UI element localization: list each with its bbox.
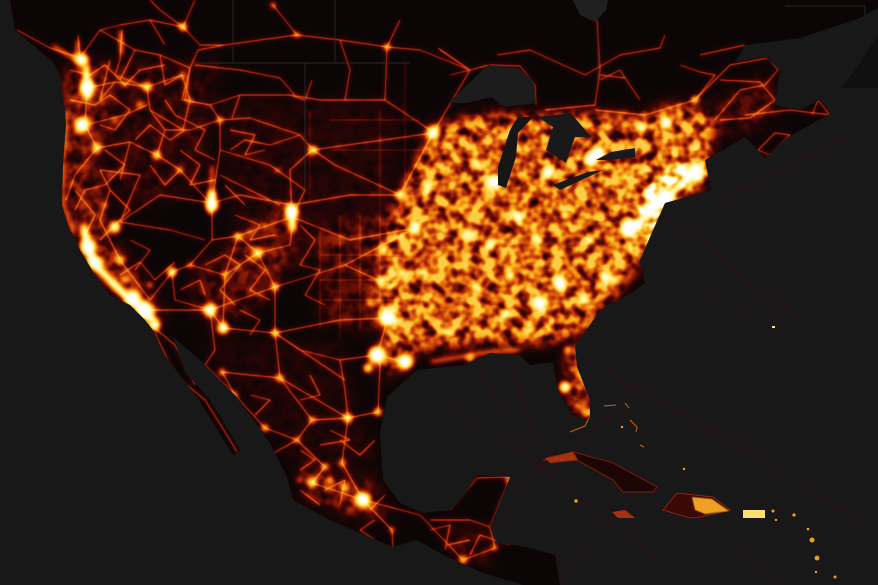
lake: Michigan <box>498 117 533 188</box>
islands: Caribbean <box>543 326 836 578</box>
lake: Erie <box>553 170 603 190</box>
island: Hispaniola bright <box>692 497 729 514</box>
island: Bermuda <box>772 326 775 328</box>
lake: Huron <box>538 113 591 163</box>
lake: Winnipeg <box>573 0 608 22</box>
icon: Newfoundland land <box>841 35 878 88</box>
lake: Ontario <box>596 148 635 160</box>
island: Cuba west bright <box>545 452 578 463</box>
island: Cuba <box>543 452 657 492</box>
city glows <box>74 2 704 564</box>
regional density <box>60 60 780 570</box>
island: Puerto Rico <box>743 510 765 518</box>
island: Hispaniola <box>663 493 730 518</box>
lake: Superior <box>448 65 536 107</box>
country borders <box>193 0 865 190</box>
faint shipping lanes <box>430 130 878 585</box>
Bahamas and Florida Keys lines <box>570 403 644 447</box>
islands: Lesser Antilles and Bahamas <box>574 426 836 578</box>
bright coastal highways <box>52 30 700 400</box>
island: Jamaica <box>612 510 635 518</box>
